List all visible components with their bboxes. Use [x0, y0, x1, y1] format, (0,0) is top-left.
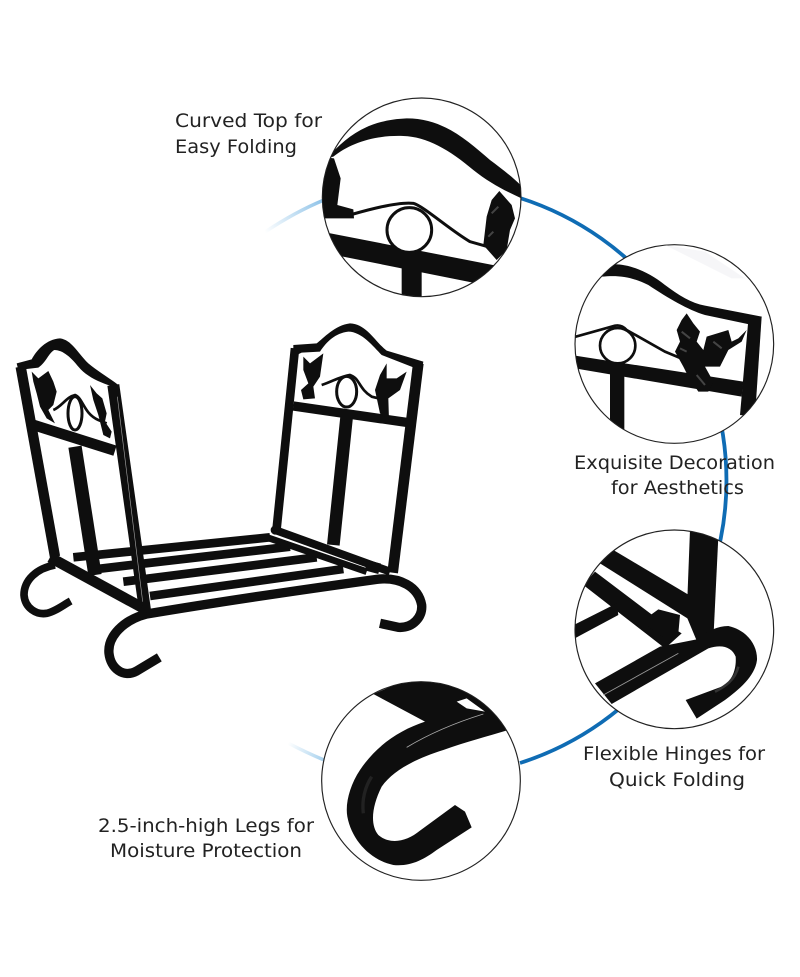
right side frame: [271, 323, 423, 574]
specular highlight: [117, 397, 143, 602]
label: decoration: [574, 452, 775, 499]
leg highlight: [407, 714, 483, 747]
background streak: [665, 245, 745, 278]
leaf cluster: [675, 313, 747, 392]
right frame ornament: [293, 323, 423, 420]
hinge: [365, 560, 381, 574]
left frame ornament: [17, 338, 118, 438]
label: hinges: Flexible Hinges for: [583, 743, 765, 765]
label: legs: [98, 815, 314, 862]
curved foot: [595, 626, 757, 719]
white gap: [457, 698, 485, 712]
foot highlight: [603, 653, 678, 695]
upper beam: [600, 550, 692, 620]
hinge barrel: [652, 609, 680, 632]
faded connector: bottom left: [288, 743, 324, 760]
hinge left: [271, 525, 280, 535]
lower beam: [583, 572, 682, 648]
label: hinges: [583, 743, 765, 791]
label: curved top: Easy Folding: [175, 136, 297, 158]
label: curved top: Curved Top for: [175, 110, 322, 132]
floor slats: [73, 537, 343, 596]
product: folding log rack: [17, 323, 423, 673]
label: decoration: for Aesthetics: [611, 477, 744, 499]
leaf left: [320, 157, 354, 218]
upright post: [687, 530, 718, 641]
left side frame: [17, 338, 145, 613]
leaf highlights: [680, 332, 722, 385]
short slat: [576, 606, 618, 638]
front leg tube with hooks: [109, 579, 422, 673]
infographic canvas: [16, 97, 774, 881]
vine and ring: [53, 395, 107, 423]
curved leg: [347, 712, 508, 865]
crossbar: [330, 233, 494, 282]
hook highlight: [715, 667, 738, 692]
arch rail: [293, 323, 423, 371]
faded connector: top left: [265, 200, 324, 232]
floor side rail: [267, 537, 367, 572]
crossbar: [575, 356, 743, 397]
top rail: [602, 264, 762, 327]
detail circle: decoration: [573, 245, 774, 443]
vine and ring: [354, 202, 486, 248]
leaves: [32, 371, 112, 438]
label: decoration: Exquisite Decoration: [574, 452, 775, 474]
label: legs: Moisture Protection: [110, 840, 302, 862]
bend highlight: [363, 777, 372, 813]
side post: [740, 317, 762, 417]
arch rail: [17, 338, 118, 392]
label: hinges: Quick Folding: [609, 769, 745, 791]
detail circle: hinge: [572, 530, 774, 729]
vine and ring: [573, 325, 685, 360]
leaf right: [483, 191, 515, 260]
centre post: [402, 268, 422, 296]
detail circle: legs: [322, 680, 520, 880]
back left foot: [24, 565, 71, 614]
detail circle: curved top: [320, 98, 525, 303]
curved top rail: [327, 118, 525, 200]
blue connector arc: [520, 198, 726, 763]
centre post: [610, 374, 624, 430]
leaf highlights: [488, 207, 498, 237]
label: curved top: [175, 110, 322, 158]
vine and ring: [322, 375, 378, 398]
leaves: [301, 353, 407, 420]
label: legs: 2.5-inch-high Legs for: [98, 815, 314, 837]
upper frame: [374, 682, 504, 728]
